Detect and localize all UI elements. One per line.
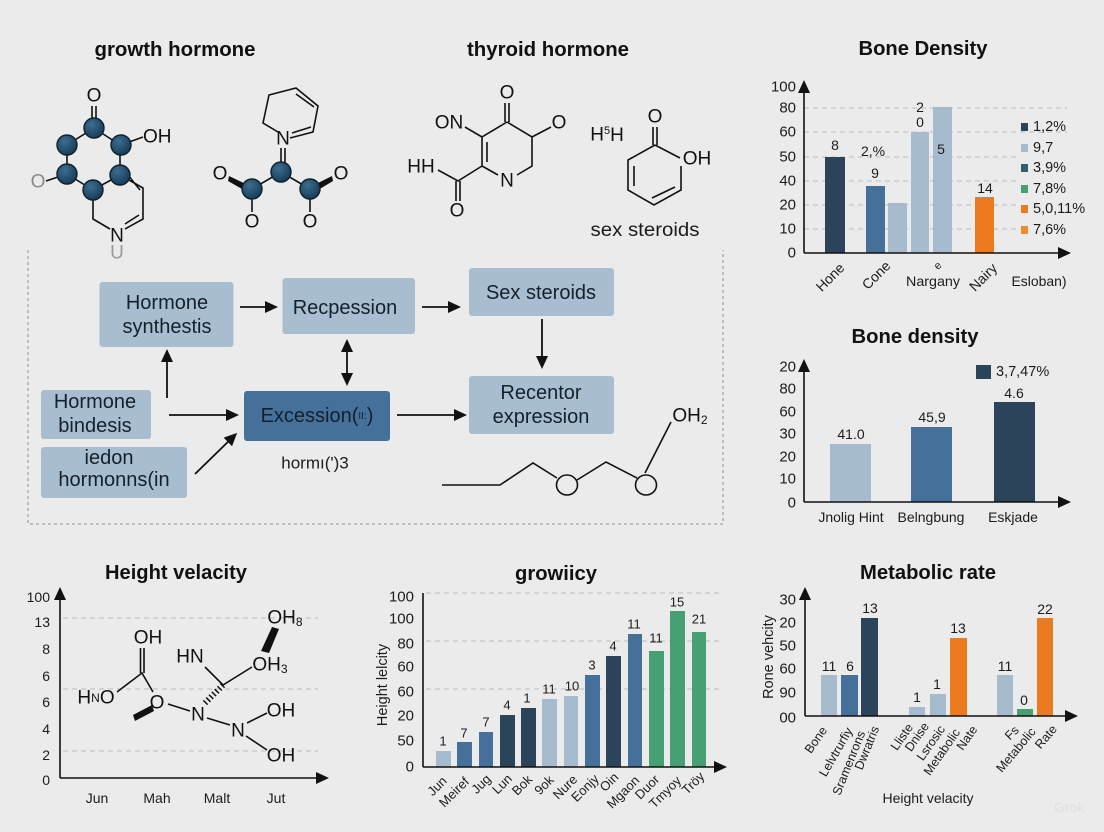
chart: metabolic rate bars: 60 xyxy=(779,660,796,678)
molecule: thyroid hormone: N xyxy=(500,170,514,192)
chart: growiicy bars: 21 xyxy=(692,612,706,626)
legend: bone density: 3,9% xyxy=(1033,160,1066,176)
molecule: growth hormone ring: O xyxy=(31,172,45,192)
molecule: growth hormone chain: O xyxy=(334,164,348,184)
chart: metabolic rate bars xyxy=(761,590,1075,806)
arrow: synthesis to recpession xyxy=(240,306,275,308)
chart: bone density bars with legend: Nairy xyxy=(966,260,1000,294)
chart: bone density three bars: 80 xyxy=(779,380,796,398)
chart: growiicy bars: 4 xyxy=(609,638,617,654)
chart: bone density bars with legend: 2 xyxy=(916,99,924,115)
chart: growiicy bars: Jug xyxy=(468,771,494,797)
molecule: height velacity: OH xyxy=(252,654,281,676)
chart: bone density bars with legend: 100 xyxy=(771,78,796,96)
chart: growiicy bars: Height lelcity xyxy=(375,643,391,726)
chart: height velacity axes with molecule: Malt xyxy=(204,790,230,806)
box: recpession xyxy=(282,278,415,334)
chart: growiicy bars: 0 xyxy=(406,758,414,776)
chart: growiicy bars: 20 xyxy=(397,708,414,724)
chart: growiicy bars: 11 xyxy=(649,630,663,646)
chart: metabolic rate bars: Dwratris xyxy=(852,724,882,772)
molecule: growth hormone chain: O xyxy=(213,164,227,184)
chart: height velacity axes with molecule: Jut xyxy=(267,790,285,806)
molecule: growth hormone chain: O xyxy=(245,212,259,232)
chart: growiicy bars: Bok xyxy=(509,771,536,798)
molecule: sex steroid: H xyxy=(610,124,624,146)
molecule: height velacity: N xyxy=(191,704,205,726)
chart: growiicy bars: Oin xyxy=(597,770,621,794)
chart: metabolic rate bars: Rone vehcity xyxy=(761,614,777,699)
chart: height velacity axes with molecule: 2 xyxy=(42,747,50,763)
title: thyroid hormone: thyroid hormone xyxy=(467,39,629,61)
title: Height velacity: Height velacity xyxy=(105,562,248,584)
chart: bone density three bars: 41.0 xyxy=(837,426,865,442)
molecule: thyroid hormone: O xyxy=(552,112,566,134)
legend: bone density: 7,6% xyxy=(1033,222,1066,238)
molecule: height velacity: OH xyxy=(267,746,295,766)
chart: growiicy bars: 80 xyxy=(397,636,414,652)
chart: growiicy bars: 1 xyxy=(439,734,447,748)
box: hormone synthesis: synthestis xyxy=(123,316,211,338)
legend: bone density: 7,8% xyxy=(1033,181,1066,197)
molecule: sex steroid: H xyxy=(590,124,604,146)
molecule: OH2 chain: OH xyxy=(672,406,701,426)
box: iedon hormonns xyxy=(41,447,187,498)
molecule: height velacity: O xyxy=(150,692,164,714)
box: hormone bindesis: Hormone xyxy=(54,391,136,413)
chart: metabolic rate bars: Lliste xyxy=(888,721,916,753)
molecule: height velacity: 8 xyxy=(296,615,303,629)
chart: growiicy bars: Nure xyxy=(550,772,580,802)
chart: height velacity axes with molecule: 100 xyxy=(27,589,50,605)
molecule: thyroid hormone: HH xyxy=(407,156,435,178)
box: sex steroids: Sex steroids xyxy=(486,282,596,304)
chart: bone density bars with legend: 80 xyxy=(779,100,796,116)
molecule: thyroid hormone: O xyxy=(450,200,464,222)
chart: height velacity axes with molecule: 0 xyxy=(42,772,50,788)
title: growth hormone: growth hormone xyxy=(94,39,256,61)
box: hormone bindesis: bindesis xyxy=(58,415,132,437)
chart: growiicy bars: 60 xyxy=(397,658,414,676)
molecule: height velacity: OH xyxy=(267,608,296,628)
chart: metabolic rate bars: Lelvtrurfiy xyxy=(816,724,856,779)
chart: bone density bars with legend: 8 xyxy=(831,137,839,153)
chart: height velacity axes with molecule: 8 xyxy=(42,641,50,657)
box: sex steroids xyxy=(469,268,614,316)
chart: height velacity axes with molecule: 13 xyxy=(34,614,50,630)
box: hormone bindesis xyxy=(41,390,151,439)
chart: growiicy bars: 4 xyxy=(503,698,511,712)
chart: growiicy bars: 9ok xyxy=(531,772,557,798)
label: hormone note: hormı(')3 xyxy=(281,454,349,472)
chart: growiicy bars: Mgaon xyxy=(604,773,642,811)
chart: bone density three bars: Jnolig Hint xyxy=(818,509,884,525)
chart: bone density bars with legend: 40 xyxy=(779,172,796,190)
chart: metabolic rate bars: Sramenrons xyxy=(830,729,868,797)
chart: bone density bars with legend: 14 xyxy=(977,180,993,196)
chart: bone density bars with legend: 20 xyxy=(779,196,796,214)
chart: height velacity axes with molecule: Jun xyxy=(86,790,108,806)
legend: 3,7,47%: 3,7,47% xyxy=(996,364,1049,380)
chart: height velacity axes with molecule: 6 xyxy=(42,668,50,684)
chart: bone density three bars: 30 xyxy=(779,426,796,442)
chart: bone density bars with legend: 5 xyxy=(937,141,945,157)
chart: growiicy bars: 100 xyxy=(389,610,414,628)
arrow: excession to receptor xyxy=(397,414,464,416)
box: excession xyxy=(244,391,390,441)
box: iedon hormonns: hormonns(in xyxy=(58,469,170,491)
chart: growiicy bars: Tmyoy xyxy=(646,773,684,811)
chart: bone density three bars: 20 xyxy=(779,448,796,466)
chart: metabolic rate bars: 0 xyxy=(1020,692,1028,708)
chart: bone density three bars: Eskjade xyxy=(988,509,1038,525)
chart: growiicy bars: 11 xyxy=(542,682,556,696)
molecule: growth hormone ring: U xyxy=(110,242,124,264)
arrow: iedon to excession xyxy=(195,435,235,474)
chart: height velacity axes with molecule: Mah xyxy=(143,790,171,806)
molecule: growth hormone chain: O xyxy=(303,212,317,232)
box: recpession: Recpession xyxy=(293,297,397,319)
chart: metabolic rate bars: 50 xyxy=(779,638,796,654)
molecule: height velacity: HN xyxy=(176,646,204,668)
chart: metabolic rate bars: 1 xyxy=(913,689,921,705)
chart: metabolic rate bars: 30 xyxy=(779,592,796,608)
chart: metabolic rate bars: 13 xyxy=(950,620,966,636)
molecule: growth hormone ring: OH xyxy=(143,126,172,148)
box: hormone synthesis: Hormone xyxy=(126,292,208,314)
molecule: sex steroid: 5 xyxy=(604,125,610,137)
chart: metabolic rate bars: 11 xyxy=(822,658,836,674)
box: receptor expression: Recentor xyxy=(500,382,582,404)
chart: bone density bars with legend: Hone xyxy=(813,259,848,294)
chart: bone density bars with legend: Nargany xyxy=(906,273,960,289)
arrow: recpession to sex steroids xyxy=(422,306,458,308)
chart: growiicy bars: Meiref xyxy=(436,774,472,810)
molecule: sex steroid: OH xyxy=(683,148,711,170)
chart: metabolic rate bars: 22 xyxy=(1037,601,1053,617)
chart: bone density bars with legend xyxy=(771,78,1085,294)
arrow: bindesis to synthesis xyxy=(166,352,168,398)
title: Metabolic rate: Metabolic rate xyxy=(860,562,996,584)
box: hormone synthesis xyxy=(100,282,234,347)
chart: metabolic rate bars: Dnise xyxy=(902,720,932,754)
title: Bone density: Bone density xyxy=(852,326,979,348)
molecule: height velacity xyxy=(77,608,303,766)
chart: growiicy bars: 60 xyxy=(397,684,414,700)
chart: bone density bars with legend: 9 xyxy=(871,165,879,181)
chart: growiicy bars: Jun xyxy=(424,773,450,799)
molecule: height velacity: OH xyxy=(134,628,162,648)
molecule: growth hormone ring: N xyxy=(110,226,124,246)
chart: height velacity axes with molecule: 6 xyxy=(42,694,50,710)
legend: bone density: 1,2% xyxy=(1033,119,1066,135)
chart: metabolic rate bars: Fs xyxy=(1002,723,1022,743)
chart: bone density bars with legend: 10 xyxy=(779,220,796,238)
chart: metabolic rate bars: Nate xyxy=(954,723,980,753)
legend: bone density xyxy=(1021,119,1085,238)
box: excession: Excession(II:) xyxy=(261,405,373,427)
chart: metabolic rate bars: 11 xyxy=(998,658,1012,674)
chart: metabolic rate bars: Metabolic xyxy=(921,726,963,778)
chart: growiicy bars: 7 xyxy=(460,726,468,740)
chart: growiicy bars xyxy=(375,588,724,811)
chart: bone density three bars: Belngbung xyxy=(898,509,964,525)
molecule: thyroid hormone xyxy=(407,82,566,222)
arrow: bindesis to excession xyxy=(169,414,236,416)
chart: growiicy bars: 1 xyxy=(523,690,531,706)
watermark: Grok xyxy=(1054,799,1085,815)
chart: bone density bars with legend: 0 xyxy=(916,114,924,130)
molecule: OH2 chain: 2 xyxy=(701,413,708,427)
molecule: thyroid hormone: ON xyxy=(435,112,463,134)
chart: bone density bars with legend: 60 xyxy=(779,124,796,140)
chart: metabolic rate bars: 6 xyxy=(846,658,854,674)
chart: growiicy bars: Duor xyxy=(632,771,663,802)
label: sex steroids: sex steroids xyxy=(590,219,700,241)
title: growiicy: growiicy xyxy=(515,563,598,585)
chart: growiicy bars: 3 xyxy=(588,658,596,672)
chart: bone density three bars: 0 xyxy=(788,494,796,512)
title: Bone Density: Bone Density xyxy=(858,38,988,60)
panel: signaling pathway frame xyxy=(28,250,723,524)
chart: metabolic rate bars: 13 xyxy=(862,600,878,616)
chart: bone density bars with legend: 0 xyxy=(788,244,796,262)
box: receptor expression xyxy=(469,376,614,434)
chart: metabolic rate bars: 20 xyxy=(779,614,796,632)
chart: bone density three bars: 4.6 xyxy=(1004,385,1024,401)
chart: bone density three bars: 60 xyxy=(779,404,796,420)
chart: bone density bars with legend: 50 xyxy=(779,148,796,166)
chart: growiicy bars: 15 xyxy=(670,594,684,610)
arrow: recpession and excession xyxy=(346,342,348,383)
molecule: OH2 chain xyxy=(442,406,708,495)
chart: metabolic rate bars: Metabolic xyxy=(993,725,1039,775)
chart: height velacity axes with molecule xyxy=(27,589,326,806)
chart: growiicy bars: Eonjy xyxy=(568,771,602,805)
molecule: height velacity: 3 xyxy=(281,662,288,676)
chart: bone density three bars: 10 xyxy=(779,470,796,488)
chart: metabolic rate bars: 1 xyxy=(933,676,941,692)
chart: bone density bars with legend: e xyxy=(932,260,944,272)
legend: bone density: 9,7 xyxy=(1033,140,1053,156)
chart: growiicy bars: 11 xyxy=(627,616,641,632)
chart: bone density three bars xyxy=(779,358,1068,525)
chart: bone density bars with legend: Esloban) xyxy=(1012,273,1066,289)
molecule: height velacity: N xyxy=(231,720,245,742)
chart: metabolic rate bars: Height velacity xyxy=(882,790,974,806)
chart: metabolic rate bars: Lsrosic xyxy=(914,723,948,763)
arrow: sex steroids to receptor xyxy=(541,319,543,366)
molecule: height velacity: OH xyxy=(267,700,295,722)
molecule: thyroid hormone: O xyxy=(500,82,514,104)
chart: metabolic rate bars: Bone xyxy=(802,724,830,756)
molecule: growth hormone chain xyxy=(213,88,348,232)
molecule: sex steroid: O xyxy=(648,106,662,128)
legend: bone density: 5,0,11% xyxy=(1033,201,1085,217)
chart: bone density three bars: 20 xyxy=(779,358,796,376)
chart: bone density bars with legend: 2,% xyxy=(861,143,885,159)
chart: growiicy bars: 100 xyxy=(389,588,414,606)
molecule: growth hormone ring: O xyxy=(87,86,101,106)
chart: growiicy bars: 7 xyxy=(482,714,490,730)
box: iedon hormonns: iedon xyxy=(85,447,133,469)
chart: metabolic rate bars: Rate xyxy=(1032,722,1060,752)
chart: bone density three bars: 45,9 xyxy=(918,409,946,425)
molecule: growth hormone ring xyxy=(31,86,172,264)
chart: growiicy bars: 50 xyxy=(397,732,414,750)
box: receptor expression: expression xyxy=(493,406,589,428)
chart: growiicy bars: Tröy xyxy=(679,768,708,797)
chart: growiicy bars: 10 xyxy=(565,678,579,694)
molecule: growth hormone chain: N xyxy=(276,128,290,150)
chart: bone density bars with legend: Cone xyxy=(859,257,894,292)
chart: metabolic rate bars: 00 xyxy=(779,710,796,726)
molecule: height velacity: HNO xyxy=(77,688,115,708)
chart: metabolic rate bars: 90 xyxy=(779,684,796,702)
chart: growiicy bars: Lun xyxy=(489,771,515,797)
chart: height velacity axes with molecule: 4 xyxy=(42,721,50,737)
molecule: sex steroid xyxy=(590,106,711,205)
